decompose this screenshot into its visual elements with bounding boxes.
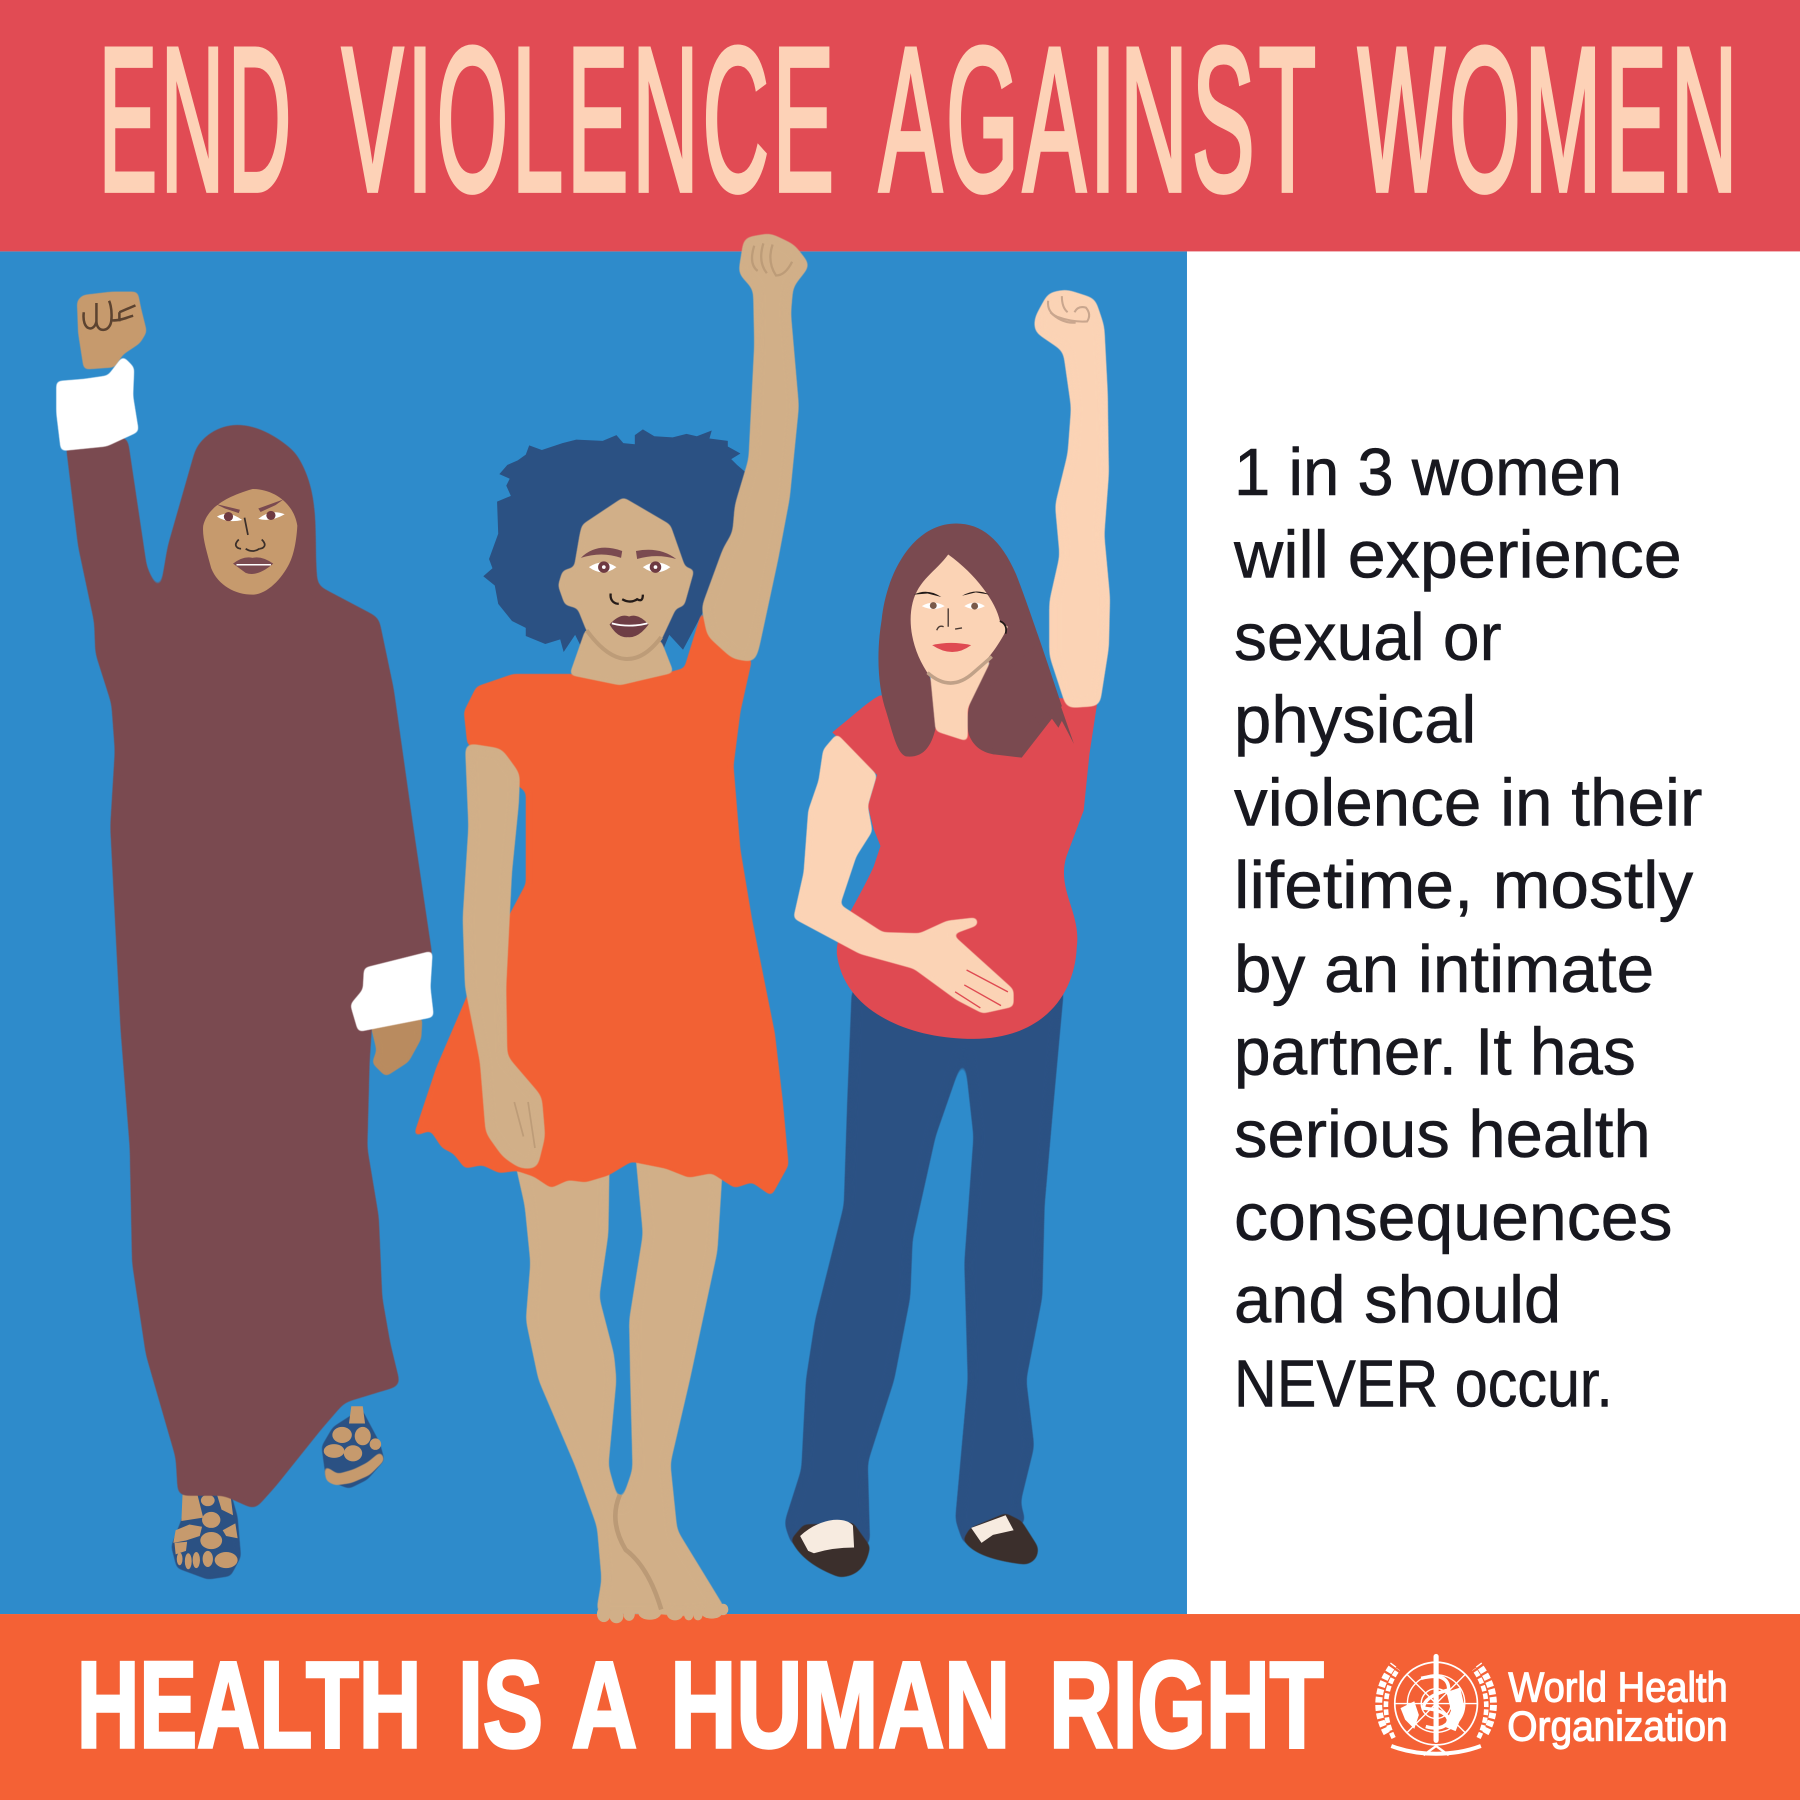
- lowered arm and hand: [793, 734, 1014, 1014]
- text block: statistic: lifetime, mostly: [1234, 849, 1694, 923]
- icon: WHO emblem: [1379, 1657, 1493, 1755]
- text block: statistic: and should: [1234, 1263, 1561, 1337]
- slogan: HEALTH: [77, 1637, 421, 1774]
- leg shadow: [615, 1495, 661, 1609]
- text block: statistic: violence in their: [1234, 766, 1702, 840]
- icon: raised fist: [77, 292, 147, 370]
- slogan: RIGHT: [1049, 1637, 1324, 1774]
- orange dress: [413, 608, 789, 1196]
- text block: statistic: consequences: [1234, 1181, 1673, 1255]
- panel: white text background: [1187, 251, 1800, 1614]
- icon: sandal front: [171, 1492, 241, 1580]
- icon: right shoe: [963, 1513, 1038, 1565]
- neck: [930, 659, 992, 742]
- face: [558, 497, 695, 660]
- raised arm and fist: [701, 233, 810, 662]
- face: [911, 554, 1008, 683]
- title: VIOLENCE: [342, 6, 838, 234]
- blue illustration panel: [0, 251, 1187, 1614]
- wordmark: World Health: [1508, 1664, 1728, 1710]
- robe: [65, 425, 433, 1510]
- text block: statistic: partner. It has: [1234, 1015, 1636, 1089]
- trousers: [784, 987, 1064, 1546]
- lowered arm and hand: [463, 743, 545, 1169]
- upper cuff: [56, 356, 139, 451]
- raised arm and fist: [1034, 289, 1110, 708]
- text block: statistic: by an intimate: [1234, 933, 1654, 1007]
- neck: [569, 629, 674, 685]
- red shirt: [832, 689, 1097, 1039]
- hair: [878, 523, 1074, 758]
- lower cuff: [350, 951, 434, 1032]
- text block: statistic: physical: [1234, 684, 1476, 758]
- title: [99, 6, 1741, 234]
- logo: World Health Organization: Organization: [1507, 1703, 1728, 1749]
- slogan: [77, 1637, 1324, 1774]
- icon: lower hand: [370, 1017, 422, 1077]
- title: END: [99, 6, 295, 234]
- figure: woman in hijab: [56, 292, 434, 1580]
- legs: [514, 1148, 728, 1616]
- slogan: HUMAN: [670, 1637, 1010, 1774]
- text block: statistic: 1 in 3 women: [1234, 436, 1622, 510]
- logo: World Health Organization: [1379, 1657, 1728, 1755]
- icon: left shoe: [791, 1520, 870, 1577]
- figure: pregnant woman in red shirt: [784, 289, 1110, 1577]
- figure: woman in orange dress: [413, 233, 810, 1623]
- text block: statistic: serious health: [1234, 1098, 1651, 1172]
- icon: toes: [597, 1604, 728, 1623]
- text block: statistic: will experience: [1233, 518, 1682, 592]
- slogan: IS: [458, 1637, 543, 1774]
- text block: statistic: sexual or: [1234, 601, 1502, 675]
- text block: statistic: [1233, 436, 1702, 1421]
- header banner: [0, 0, 1800, 251]
- slogan: A: [572, 1637, 637, 1774]
- text block: statistic: NEVER occur.: [1234, 1347, 1613, 1421]
- face: [203, 489, 297, 595]
- footer banner: [0, 1614, 1800, 1800]
- hair: [483, 429, 745, 653]
- icon: sandal rear: [321, 1406, 385, 1489]
